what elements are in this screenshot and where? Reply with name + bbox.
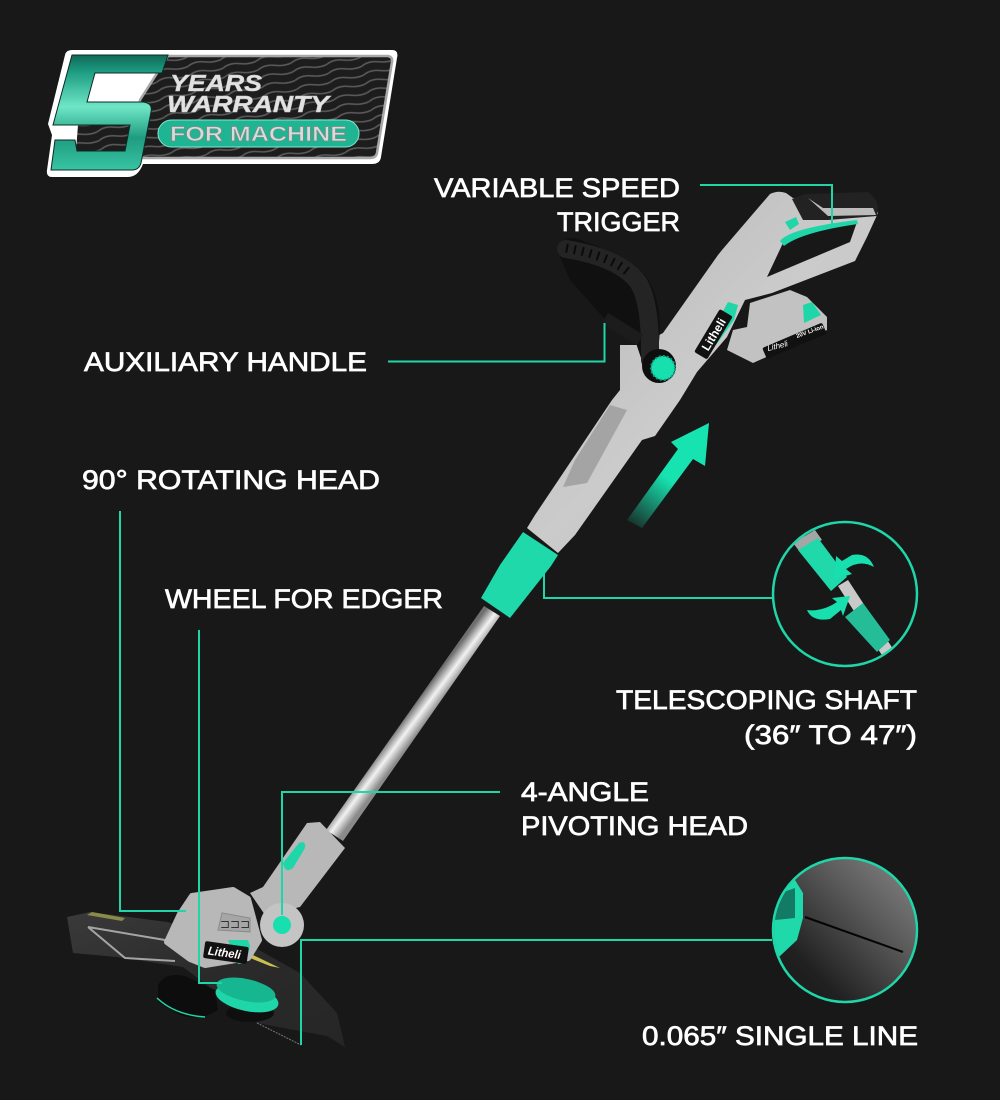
leader line: single line: [301, 940, 772, 1045]
label: telescoping shaft: TELESCOPING SHAFT: [616, 685, 917, 715]
teal wheel: [213, 973, 281, 1022]
numeral 5: [51, 55, 168, 170]
label: rotating head: 90° ROTATING HEAD: [82, 465, 380, 495]
label: pivoting head: 4-ANGLE: [521, 777, 649, 807]
auxiliary handle: [557, 238, 676, 383]
main body and rear handle: [527, 192, 878, 553]
callout: single line detail: [770, 855, 920, 1005]
battery: Litheli: [766, 339, 789, 353]
trigger: [780, 217, 858, 246]
badge pill: for machine: [158, 120, 359, 147]
teal collar: [481, 532, 558, 618]
litheli head label: Litheli: [207, 944, 242, 962]
badge pill: for machine: FOR MACHINE: [170, 123, 347, 146]
motion arrow: [627, 423, 709, 528]
twist arrows: [807, 554, 874, 620]
leader line: pivoting head: [282, 792, 500, 915]
label: auxiliary handle: AUXILIARY HANDLE: [84, 347, 367, 377]
leader line: variable speed trigger: [700, 185, 832, 225]
label: telescoping shaft: [616, 685, 917, 750]
leader line: rotating head: [120, 511, 186, 911]
label: variable speed trigger: TRIGGER: [557, 207, 680, 237]
spool: [158, 975, 218, 1018]
knob: [642, 349, 676, 383]
leader line: telescoping shaft: [544, 572, 773, 598]
rear grip: [792, 192, 878, 220]
warranty badge: [47, 50, 397, 177]
label: single line: 0.065″ SINGLE LINE: [642, 1021, 918, 1051]
label: variable speed trigger: [434, 173, 680, 237]
switch label litheli: [694, 302, 738, 360]
shaft: [326, 606, 500, 841]
leader line: auxiliary handle: [388, 323, 604, 362]
callout: telescoping shaft detail: [773, 522, 917, 666]
badge text: years warranty: YEARS: [170, 70, 263, 96]
label: pivoting head: PIVOTING HEAD: [521, 811, 748, 841]
motor housing: ⊐⊐⊐: [220, 917, 250, 931]
badge text: years warranty: [167, 70, 332, 117]
battery: [727, 290, 827, 363]
cutting head guard: [67, 912, 345, 1047]
motor housing: [167, 890, 259, 965]
battery: 20V Li-ion: [796, 324, 825, 340]
label: pivoting head: [521, 777, 748, 841]
label: wheel for edger: WHEEL FOR EDGER: [165, 584, 443, 614]
label: variable speed trigger: VARIABLE SPEED: [434, 173, 680, 203]
badge text: years warranty: WARRANTY: [167, 91, 332, 117]
leader line: wheel for edger: [199, 630, 222, 983]
handle opening: [767, 222, 857, 277]
label: telescoping shaft: (36″ TO 47″): [744, 720, 917, 750]
switch label litheli: Litheli: [699, 316, 729, 353]
pivot neck: [250, 822, 345, 947]
